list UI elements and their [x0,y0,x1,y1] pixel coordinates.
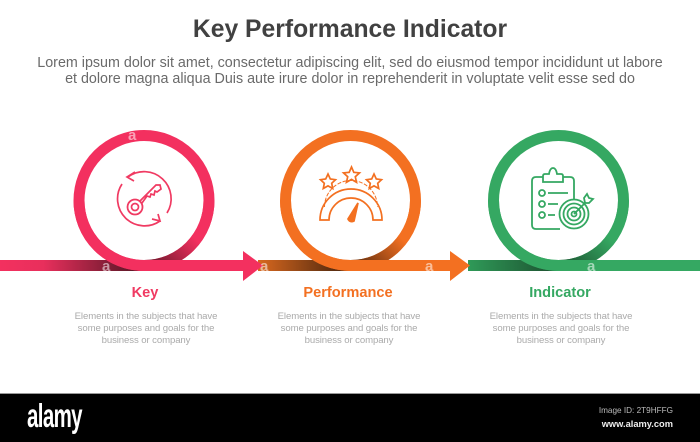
arrow head red [243,251,263,281]
description: Key: Elements in the subjects that have [75,311,217,322]
description: Key [75,311,217,346]
watermark marks: a [128,127,137,144]
icon: key with cycle arrows [118,172,171,226]
description: Performance: Elements in the subjects that have [278,311,420,322]
watermark marks: a [102,258,111,275]
description: Performance [278,311,420,346]
step 3 text [490,285,632,346]
watermark marks: a [260,258,269,275]
website: www.alamy.com [602,419,673,429]
description: Indicator [490,311,632,346]
heading: Key: Key [132,285,158,301]
description: Indicator: business or company [517,335,605,346]
description: Key: business or company [102,335,190,346]
description: Indicator: Elements in the subjects that have [490,311,632,322]
heading: Indicator: Indicator [529,285,591,301]
watermark marks: a [425,258,434,275]
image id: Image ID: 2T9HFFG [599,406,673,415]
arrow head orange [450,251,470,281]
footer bar [0,393,700,442]
subtitle text: Lorem ipsum dolor sit amet, consectetur adipiscing elit, sed do eiusmod tempor incididunt ut labore [37,55,663,71]
step 2 text [278,285,420,346]
orange step ribbon [258,136,470,281]
step 1 text [75,285,217,346]
icon: stars and gauge [320,167,382,222]
icon: clipboard and target [532,168,593,229]
green step ribbon [468,136,700,271]
watermark marks: a [587,258,596,275]
red step ribbon [0,136,263,281]
subtitle text: et dolore magna aliqua Duis aute irure dolor in reprehenderit in voluptate velit esse sed do [65,71,635,87]
subtitle text [37,55,663,87]
description: Performance: some purposes and goals for the [281,323,417,334]
description: Key: some purposes and goals for the [78,323,214,334]
title: Key Performance Indicator [193,16,507,43]
heading: Performance: Performance [303,285,393,301]
description: Indicator: some purposes and goals for the [493,323,629,334]
description: Performance: business or company [305,335,393,346]
alamy logo: alamy [27,397,82,434]
watermark marks [102,127,596,275]
